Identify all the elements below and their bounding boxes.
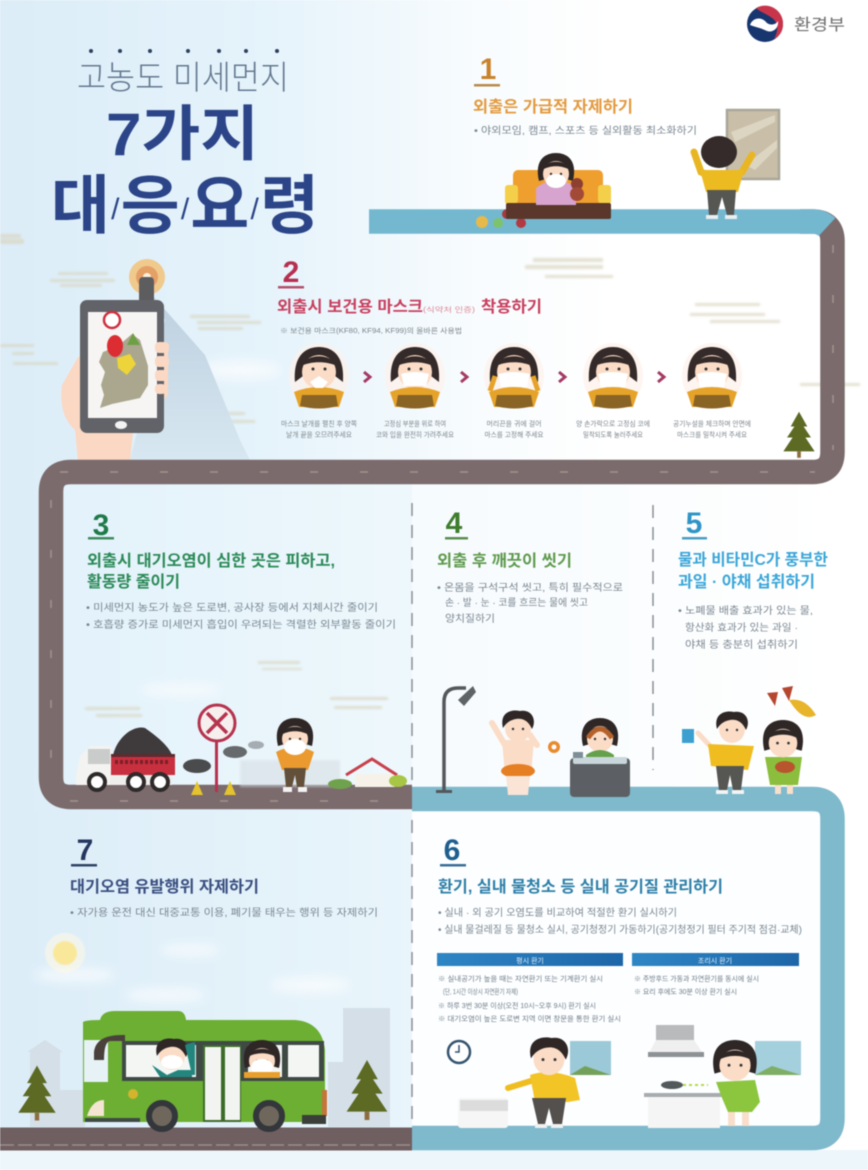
panel: step 6 background bbox=[412, 810, 822, 1128]
step 5 bbox=[678, 507, 828, 794]
step captions: 공기누설을 체크하며 안면에 bbox=[673, 419, 751, 428]
lines: ※ 실내공기가 높을 때는 자연환기 또는 기계환기 실시 bbox=[438, 974, 603, 983]
teddy bear bbox=[571, 178, 583, 190]
step captions: 코와 입을 완전히 가려주세요 bbox=[376, 430, 455, 439]
lines: ※ 주방후드 가동과 자연환기를 동시에 실시 bbox=[634, 974, 759, 983]
icon: tree bbox=[783, 412, 815, 458]
note: ※ 보건용 마스크(KF80, KF94, KF99)의 올바른 사용법 bbox=[280, 326, 462, 335]
step captions: 마스를 고정해 주세요 bbox=[484, 430, 544, 439]
icon: girl at wash basin bbox=[570, 718, 630, 797]
step face 1 bbox=[289, 343, 349, 409]
door bbox=[203, 1045, 241, 1122]
step captions: 머리끈을 귀에 걸어 bbox=[486, 419, 542, 428]
step captions: 마스크 날개를 펼친 후 양쪽 bbox=[281, 419, 358, 428]
heading: 대기오염 유발행위 자제하기 bbox=[70, 877, 259, 896]
number underline bbox=[278, 286, 304, 288]
header bar bbox=[632, 953, 799, 966]
phone body bbox=[80, 300, 164, 433]
step 6 bbox=[437, 834, 802, 1128]
bullet: • 자가용 운전 대신 대중교통 이용, 폐기물 태우는 행위 등 자제하기 bbox=[70, 906, 378, 919]
heading: 물과 비타민C가 풍부한 bbox=[678, 551, 828, 569]
icon: shower bbox=[436, 686, 476, 793]
icon: ministry logo bbox=[747, 6, 845, 42]
title line 3: / bbox=[111, 193, 120, 226]
window frame bbox=[122, 1041, 324, 1081]
passenger girl bbox=[244, 1040, 280, 1074]
map bbox=[99, 334, 148, 408]
body bbox=[700, 170, 744, 192]
logo text: 환경부 bbox=[794, 16, 845, 34]
soft white clouds bbox=[35, 360, 350, 1002]
icon: stove and counter bbox=[644, 1081, 724, 1128]
number: 1 bbox=[480, 53, 496, 86]
windows bbox=[126, 1045, 196, 1077]
number: 5 bbox=[686, 507, 702, 540]
step face 5 bbox=[682, 343, 742, 409]
bus decor bbox=[128, 1089, 138, 1099]
step 4 bbox=[436, 507, 630, 797]
head from behind bbox=[701, 136, 737, 168]
icon: girl on sofa bbox=[476, 153, 611, 228]
sofa bbox=[505, 185, 611, 205]
number: 7 bbox=[77, 834, 93, 867]
icon: air purifier bbox=[458, 1098, 508, 1128]
road segment: blue lower loop bbox=[412, 799, 832, 1138]
heading note: (식약처 인증) bbox=[423, 305, 475, 314]
step captions: 양 손가락으로 고정심 코에 bbox=[576, 419, 650, 428]
hand bbox=[61, 345, 168, 462]
step captions: 밀착되도록 눌러주세요 bbox=[583, 430, 643, 439]
title line 1: 고농도 미세먼지 bbox=[77, 59, 289, 96]
signal circle bbox=[129, 259, 165, 295]
number underline bbox=[88, 537, 114, 540]
bullets: • 온몸을 구석구석 씻고, 특히 필수적으로 bbox=[437, 582, 623, 594]
icon: dump truck bbox=[76, 727, 175, 790]
bullets: • 실내 · 외 공기 오염도를 비교하여 적절한 환기 실시하기 bbox=[438, 906, 677, 919]
windshield bbox=[84, 1040, 108, 1082]
number: 4 bbox=[446, 507, 463, 540]
title line 3: 령 bbox=[260, 170, 319, 242]
icon: green bus bbox=[83, 1011, 327, 1129]
icon: sun bbox=[45, 933, 85, 973]
road segment: blue top bbox=[369, 222, 827, 227]
step captions: 날개 끝을 오므려주세요 bbox=[286, 430, 353, 439]
bullets: • 노폐물 배출 효과가 있는 물, bbox=[678, 605, 813, 617]
step 4: 손 · 발 · 눈 · 코를 흐르는 물에 씻고 bbox=[445, 597, 588, 609]
icon: washing boy bbox=[492, 710, 560, 795]
legs bbox=[707, 190, 736, 215]
step 1 bbox=[473, 53, 779, 228]
screen bbox=[88, 312, 157, 418]
arrow bbox=[461, 372, 467, 382]
heading part 2: 착용하기 bbox=[481, 298, 542, 316]
girl bbox=[536, 180, 576, 205]
icon: phone with air-quality map bbox=[61, 259, 250, 462]
icon: exhaust smoke bbox=[183, 741, 264, 773]
arms bbox=[694, 152, 752, 178]
step 4: 양치질하기 bbox=[445, 612, 495, 625]
road segment: grey bottom bbox=[0, 1128, 412, 1150]
title line 3: / bbox=[251, 193, 260, 226]
icon: man ventilating bbox=[508, 1037, 580, 1128]
number: 6 bbox=[444, 834, 460, 867]
fingers bbox=[155, 342, 169, 394]
arrow bbox=[658, 372, 664, 382]
step face 4 bbox=[583, 343, 643, 409]
number underline bbox=[445, 537, 468, 540]
number underline bbox=[440, 864, 466, 866]
icon: girl cooking bbox=[713, 1040, 760, 1126]
step 7 bbox=[18, 834, 390, 1129]
road segment: grey upper loop bbox=[51, 222, 832, 797]
step 5: 과일 · 야채 섭취하기 bbox=[678, 573, 815, 591]
heading: 외출은 가급적 자제하기 bbox=[473, 98, 633, 116]
icon: man at window bbox=[694, 110, 779, 219]
icon: clock bbox=[448, 1041, 470, 1063]
table: normal ventilation: 평시 환기 bbox=[516, 956, 544, 965]
icon: fruits bbox=[767, 686, 816, 717]
city haze bbox=[240, 760, 340, 787]
table: cooking ventilation bbox=[632, 953, 799, 996]
step 5: 항산화 효과가 있는 과일 · bbox=[685, 622, 798, 634]
title line 3: / bbox=[181, 193, 190, 226]
arrow bbox=[559, 372, 565, 382]
table: normal ventilation: (단, 1시간 이상시 자연환기 자제) bbox=[443, 987, 518, 996]
exhaust hood bbox=[94, 1035, 125, 1060]
step face 2 bbox=[385, 343, 445, 409]
bottom strip bbox=[0, 1150, 868, 1170]
bus body bbox=[83, 1011, 325, 1122]
panel: step 4 and 5 background bbox=[412, 484, 822, 788]
number: 2 bbox=[283, 256, 299, 289]
table: normal ventilation bbox=[437, 953, 623, 1023]
title line 3: 요 bbox=[190, 170, 249, 242]
heading: 환기, 실내 물청소 등 실내 공기질 관리하기 bbox=[438, 878, 723, 896]
step captions bbox=[281, 419, 751, 439]
window blind bbox=[727, 110, 779, 179]
icon: prohibition sign bbox=[191, 705, 236, 795]
icon: kitchen hood bbox=[648, 1025, 704, 1057]
number underline bbox=[71, 864, 97, 866]
step 3: 활동량 줄이기 bbox=[87, 573, 180, 591]
map pin bbox=[104, 312, 120, 328]
bullet: • 야외모임, 캠프, 스포츠 등 실외활동 최소화하기 bbox=[474, 124, 697, 137]
icon: left tree bbox=[18, 1066, 56, 1120]
title line 2: 7가지 bbox=[106, 101, 259, 168]
icon: girl with mask bbox=[276, 718, 314, 792]
step 3: • 호흡량 증가로 미세먼지 흡입이 우려되는 격렬한 외부활동 줄이기 bbox=[86, 618, 396, 631]
city buildings bbox=[27, 1008, 390, 1127]
icon: window left bbox=[570, 1041, 611, 1075]
icon: window right bbox=[755, 1041, 801, 1075]
icon: house bbox=[328, 759, 407, 789]
heading: 외출 후 깨끗이 씻기 bbox=[437, 552, 572, 570]
icon: girl with vegetables bbox=[763, 720, 803, 794]
table: normal ventilation: ※ 대기오염이 높은 도로변 지역 이면 창문을 통한 환기 실시 bbox=[438, 1014, 621, 1023]
road lane markings bbox=[0, 245, 833, 1145]
passenger boy bbox=[156, 1038, 188, 1070]
antenna bbox=[139, 277, 154, 305]
step captions: 마스크를 밀착시켜 주세요 bbox=[677, 430, 748, 439]
number underline bbox=[682, 537, 707, 540]
header bar bbox=[437, 953, 623, 966]
phone shadow bbox=[130, 295, 250, 460]
step 5: 야채 등 충분히 섭취하기 bbox=[685, 638, 798, 651]
home button bbox=[115, 421, 127, 429]
toys bbox=[476, 216, 488, 228]
step face 3 bbox=[484, 343, 544, 409]
step 2 bbox=[277, 256, 815, 458]
heading part 1: 외출시 보건용 마스크 bbox=[277, 298, 423, 316]
title dots bbox=[89, 49, 279, 53]
number: 3 bbox=[93, 509, 109, 542]
bullets: • 미세먼지 농도가 높은 도로변, 공사장 등에서 지체시간 줄이기 bbox=[86, 602, 378, 614]
step 3 bbox=[76, 509, 407, 795]
heading: 외출시 대기오염이 심한 곳은 피하고, bbox=[87, 552, 335, 570]
mask steps bbox=[289, 343, 742, 409]
title line 3: 대 bbox=[51, 170, 110, 242]
panel: step 7 background bbox=[0, 810, 412, 1128]
road bbox=[0, 222, 832, 1139]
table: cooking ventilation: ※ 요리 후에도 30분 이상 환기 실시 bbox=[634, 987, 737, 996]
number underline bbox=[474, 84, 500, 86]
arrow bbox=[364, 372, 370, 382]
title bbox=[51, 49, 319, 242]
distant clouds bbox=[0, 234, 860, 717]
step 6: • 실내 물걸레질 등 물청소 실시, 공기청정기 가동하기(공기청정기 필터 주기적 점검·교체) bbox=[438, 923, 802, 936]
icon: right tree bbox=[347, 1060, 387, 1120]
step captions: 고정심 부분을 위로 하여 bbox=[384, 419, 446, 428]
table: normal ventilation: ※ 하루 3번 30분 이상(오전 10시~오후 9시) 환기 실시 bbox=[438, 1001, 596, 1010]
icon: man with water cup bbox=[682, 711, 754, 794]
dashed dividers bbox=[412, 503, 653, 1125]
title line 3: 응 bbox=[121, 170, 180, 242]
table: cooking ventilation: 조리시 환기 bbox=[698, 956, 732, 965]
wheels bbox=[149, 1103, 282, 1129]
panel: step 3 background bbox=[63, 484, 412, 785]
